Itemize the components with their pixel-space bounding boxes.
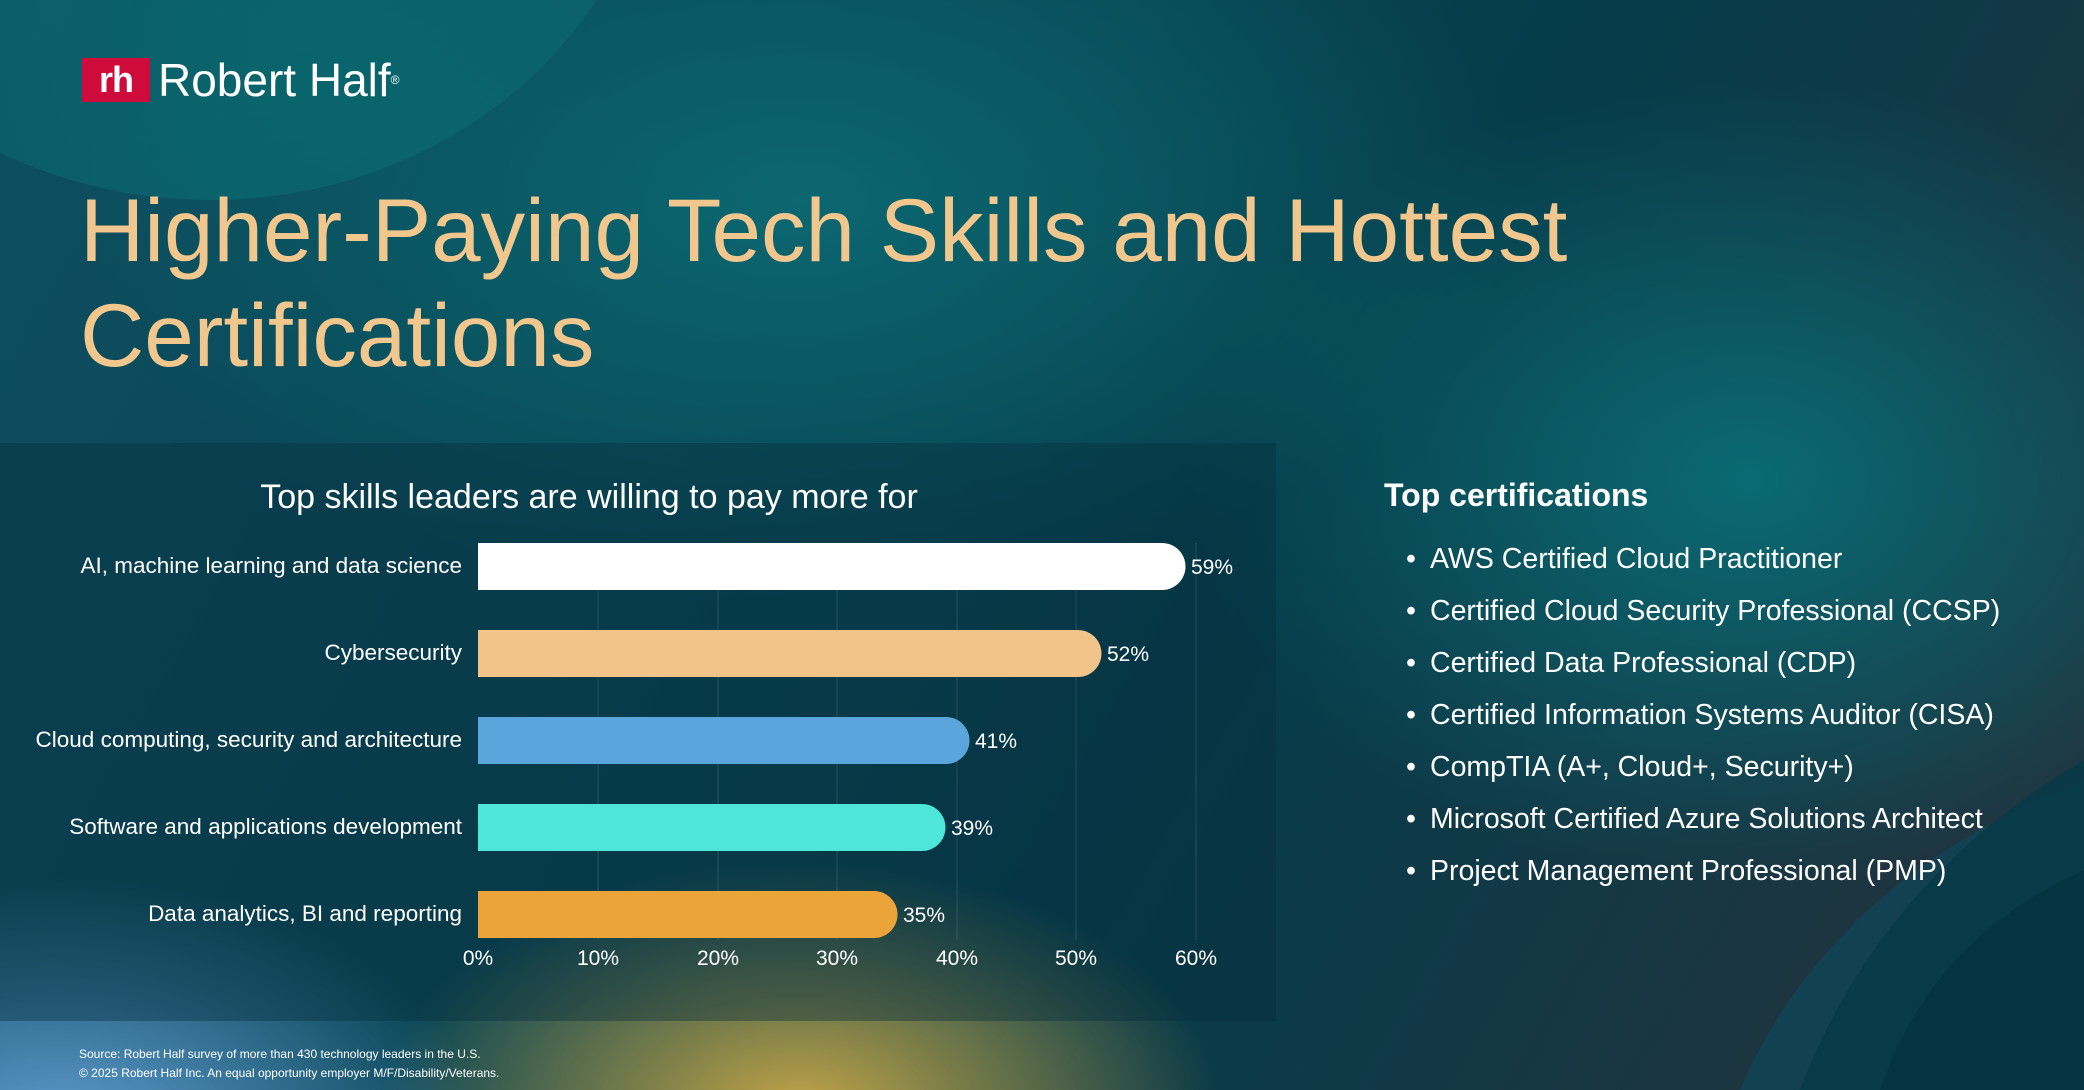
list: certifications: Certified Data Professional (CDP): [1430, 647, 1856, 679]
heading: top certifications: Top certifications: [1384, 477, 1648, 513]
list: certifications: Project Management Professional (PMP): [1430, 855, 1946, 887]
list: certifications: AWS Certified Cloud Practitioner: [1430, 543, 1842, 575]
title: Higher-Paying Tech Skills and Hottest: [80, 180, 1567, 280]
bar chart: 60%: [1175, 947, 1217, 970]
footer: Source: Robert Half survey of more than 430 technology leaders in the U.S.: [79, 1047, 481, 1061]
decorative curves bottom-right: [1740, 760, 2084, 1090]
chart title: Top skills leaders are willing to pay more for: [260, 478, 918, 516]
list: certifications: •: [1406, 751, 1416, 783]
bar chart: Cloud computing, security and architecture: [36, 727, 462, 752]
list: certifications: •: [1406, 699, 1416, 731]
list: certifications: [1406, 543, 2000, 887]
title: Certifications: [80, 285, 594, 385]
bar chart: 52%: [1107, 643, 1149, 666]
footer: [79, 1047, 499, 1080]
list: certifications: CompTIA (A+, Cloud+, Security+): [1430, 751, 1854, 783]
panel: chart: [0, 443, 1276, 1021]
bar chart: 35%: [903, 904, 945, 927]
bar chart: 30%: [816, 947, 858, 970]
list: certifications: •: [1406, 647, 1416, 679]
bar chart: 59%: [1191, 556, 1233, 579]
bar chart: 20%: [697, 947, 739, 970]
decorative circle top-left: [0, 0, 660, 200]
bar chart: Software and applications development: [69, 814, 463, 839]
logo: rh: [99, 59, 133, 100]
bar chart: 40%: [936, 947, 978, 970]
list: certifications: Microsoft Certified Azure Solutions Architect: [1430, 803, 1983, 835]
bar chart: 41%: [975, 730, 1017, 753]
footer: © 2025 Robert Half Inc. An equal opportunity employer M/F/Disability/Veterans.: [79, 1066, 499, 1080]
bar chart: AI, machine learning and data science: [80, 553, 462, 578]
bar chart: 10%: [577, 947, 619, 970]
list: certifications: •: [1406, 543, 1416, 575]
bar chart: 50%: [1055, 947, 1097, 970]
bar chart: Data analytics, BI and reporting: [148, 901, 462, 926]
bar chart: Cybersecurity: [324, 640, 463, 665]
bar chart: [36, 543, 1233, 970]
bar chart: 0%: [463, 947, 493, 970]
list: certifications: •: [1406, 803, 1416, 835]
list: certifications: •: [1406, 595, 1416, 627]
logo: Robert Half®: [158, 54, 400, 106]
list: certifications: Certified Information Systems Auditor (CISA): [1430, 699, 1994, 731]
list: certifications: Certified Cloud Security Professional (CCSP): [1430, 595, 2000, 627]
list: certifications: •: [1406, 855, 1416, 887]
title: [80, 180, 1567, 385]
bar chart: 39%: [951, 817, 993, 840]
